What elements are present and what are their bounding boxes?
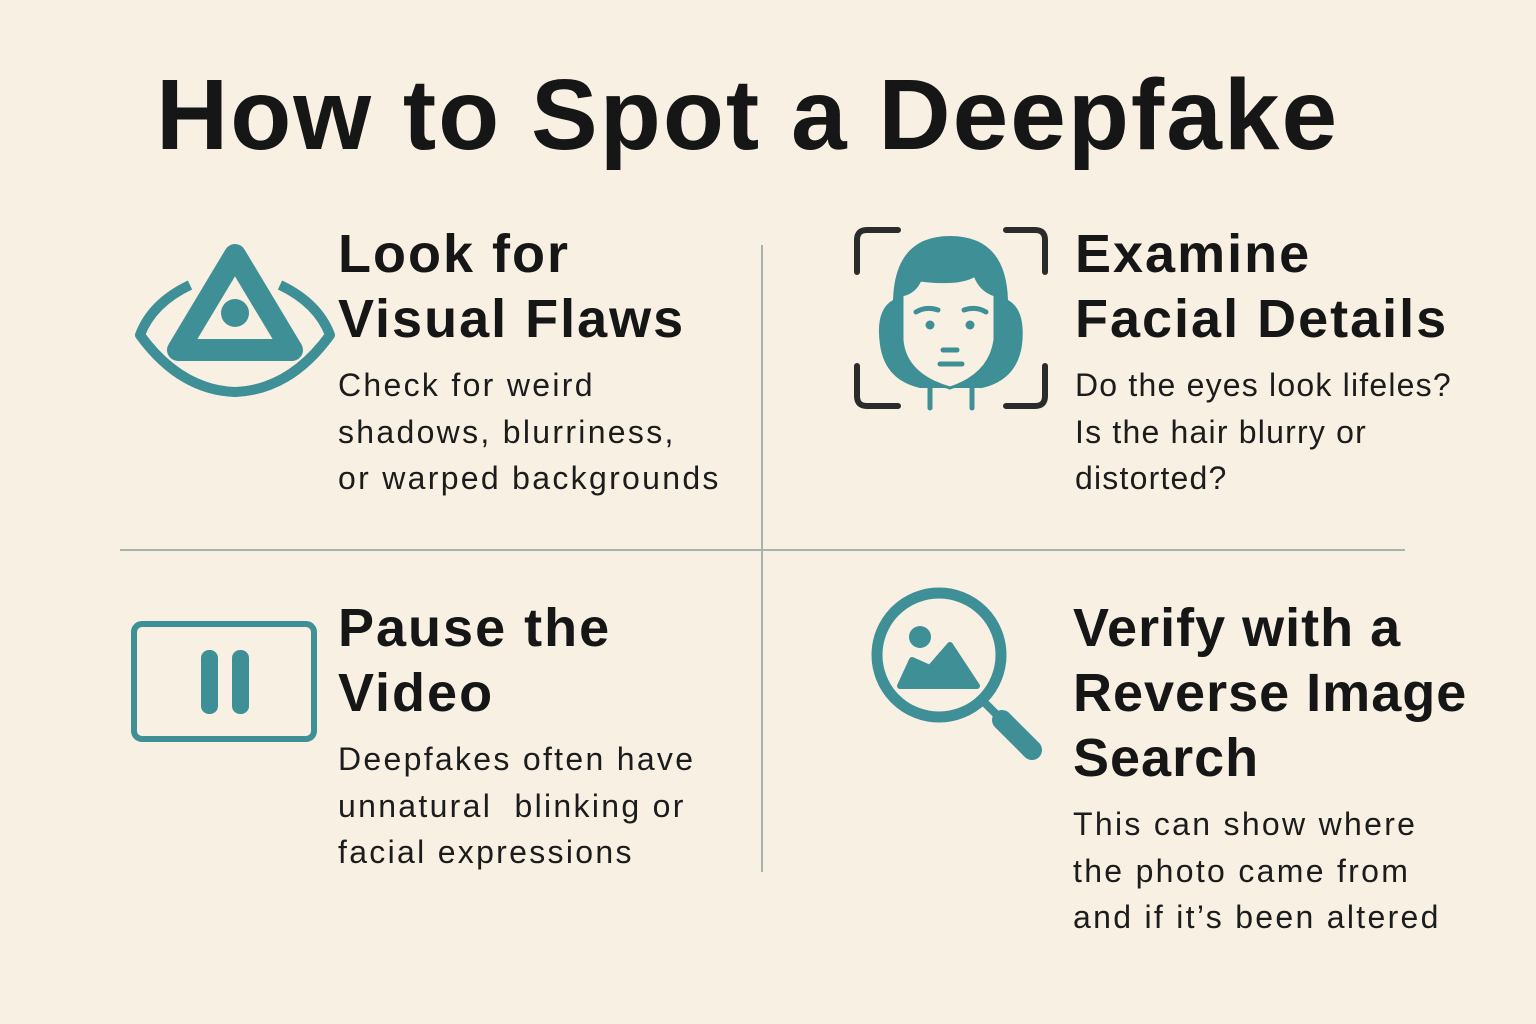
icon: magnifier image search — [872, 588, 1042, 760]
panel: reverse image search — [1073, 598, 1467, 935]
panel: reverse image search: Verify with a — [1073, 598, 1401, 658]
panel: pause the video: unnatural blinking or — [338, 788, 686, 824]
panel: facial details: Do the eyes look lifeles? — [1075, 367, 1452, 403]
panel: visual flaws — [338, 224, 721, 496]
panel: visual flaws: Check for weird — [338, 367, 595, 403]
panel: facial details: Facial Details — [1075, 289, 1448, 349]
panel: pause the video: Deepfakes often have — [338, 741, 695, 777]
icon: face scan — [854, 227, 1048, 410]
panel: visual flaws: shadows, blurriness, — [338, 414, 676, 450]
icon: pause button — [131, 621, 317, 742]
panel: visual flaws: Visual Flaws — [338, 289, 685, 349]
panel: reverse image search: and if it’s been altered — [1073, 899, 1441, 935]
panel: reverse image search: Reverse Image — [1073, 663, 1467, 723]
panel: facial details: Is the hair blurry or — [1075, 414, 1367, 450]
panel: facial details: Examine — [1075, 224, 1311, 284]
panel: visual flaws: or warped backgrounds — [338, 460, 721, 496]
title: How to Spot a Deepfake — [156, 59, 1339, 171]
icon: eye with triangle — [135, 244, 335, 397]
panel: pause the video: Video — [338, 663, 494, 723]
panel: reverse image search: This can show where — [1073, 806, 1417, 842]
panel: facial details — [1075, 224, 1452, 496]
panel: facial details: distorted? — [1075, 460, 1228, 496]
panel: reverse image search: the photo came from — [1073, 852, 1410, 888]
panel: pause the video: facial expressions — [338, 834, 634, 870]
panel: reverse image search: Search — [1073, 728, 1259, 788]
panel: pause the video: Pause the — [338, 598, 611, 658]
panel: visual flaws: Look for — [338, 224, 570, 284]
panel: pause the video — [338, 598, 695, 870]
